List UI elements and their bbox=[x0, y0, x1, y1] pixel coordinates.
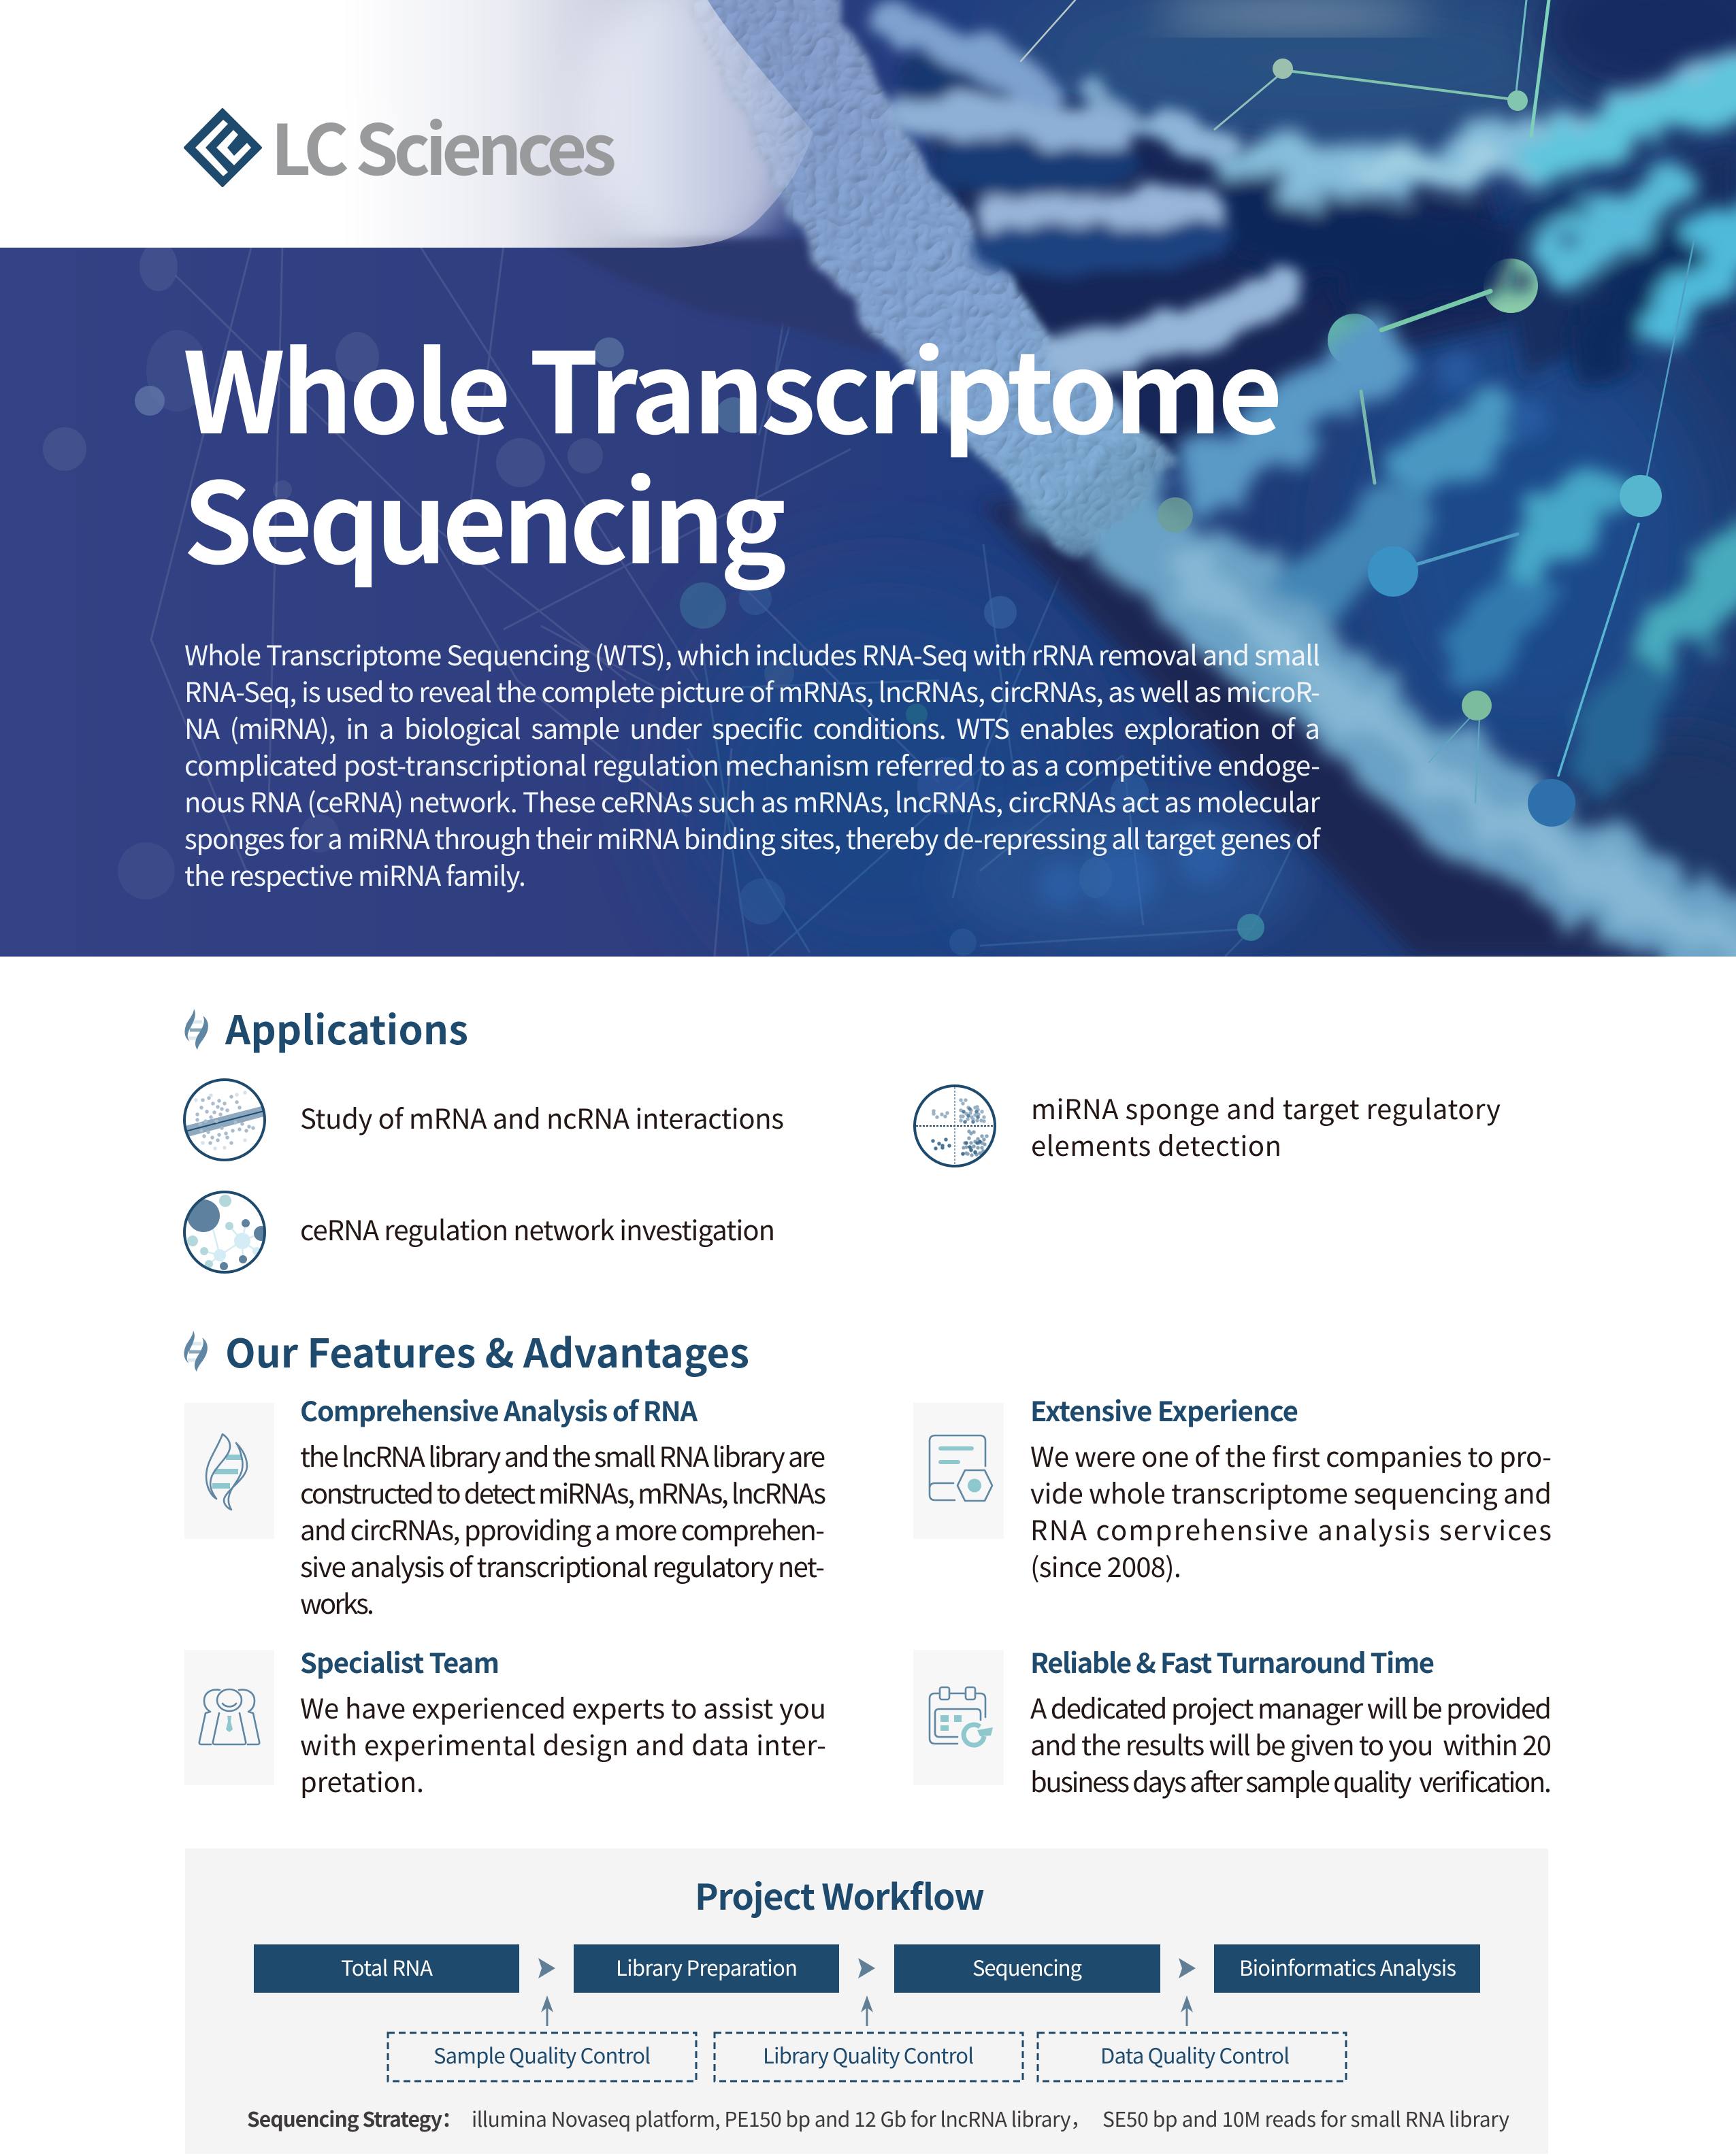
step: Total RNA: Total RNA bbox=[341, 1951, 433, 1982]
step: Bioinformatics Analysis bbox=[1214, 1944, 1480, 1993]
icon: scatter plot circle bbox=[182, 1080, 267, 1160]
quality control: data: Data Quality Control bbox=[1100, 2039, 1290, 2070]
sequencing strategy note: Sequencing Strategy： bbox=[247, 2103, 462, 2133]
logo panel: white rounded fade bbox=[0, 0, 813, 248]
heading: Applications: Applications bbox=[225, 999, 468, 1056]
feature: Comprehensive Analysis of RNA: the lncRNA library and the small RNA library are bbox=[300, 1436, 825, 1475]
intro paragraph: Whole Transcriptome Sequencing (WTS), which includes RNA-Seq with rRNA removal and small bbox=[184, 634, 1320, 674]
far DNA rungs and lower strand, defocused bbox=[1062, 75, 1736, 973]
quality control: library bbox=[715, 2033, 1023, 2081]
feature: Comprehensive Analysis of RNA: and circRNAs, pproviding a more comprehen- bbox=[300, 1509, 825, 1548]
DNA backbone strand bbox=[749, 0, 1130, 510]
feature: Comprehensive Analysis of RNA: Comprehensive Analysis of RNA bbox=[300, 1390, 698, 1429]
network nodes behind the DNA bbox=[1328, 259, 1538, 367]
application: miRNA sponge detection: miRNA sponge and target regulatory bbox=[1031, 1088, 1501, 1127]
sequencing strategy note: SE50 bp and 10M reads for small RNA library bbox=[1102, 2103, 1509, 2133]
feature: Specialist Team: Specialist Team bbox=[300, 1642, 499, 1681]
feature: Extensive Experience bbox=[913, 1390, 1552, 1585]
icon: team tile bbox=[184, 1650, 274, 1785]
intro paragraph: sponges for a miRNA through their miRNA binding sites, thereby de-repressing all target genes of bbox=[184, 818, 1322, 857]
feature: Extensive Experience: RNA comprehensive analysis services bbox=[1030, 1509, 1552, 1548]
title: Whole Transcriptome bbox=[183, 305, 1283, 466]
intro paragraph: the respective miRNA family. bbox=[184, 855, 526, 894]
application: ceRNA regulation network bbox=[184, 1192, 775, 1272]
feature: Reliable & Fast Turnaround Time bbox=[913, 1642, 1552, 1800]
feature: Extensive Experience: Extensive Experience bbox=[1030, 1390, 1298, 1429]
icon: small DNA helix bbox=[184, 1009, 208, 1050]
arrow: step chevrons bbox=[538, 1958, 1196, 1978]
panel: project workflow bbox=[185, 1848, 1548, 2154]
logo mark diamond bbox=[185, 110, 261, 186]
application: ceRNA regulation network: ceRNA regulation network investigation bbox=[300, 1209, 775, 1248]
quality control: data bbox=[1038, 2033, 1346, 2081]
sequencing strategy note: illumina Novaseq platform, PE150 bp and 12 Gb for lncRNA library， bbox=[472, 2103, 1091, 2133]
sequencing strategy note bbox=[247, 2103, 1509, 2133]
intro paragraph: NA (miRNA), in a biological sample under specific conditions. WTS enables exploration of a bbox=[184, 708, 1320, 747]
icon: small DNA helix bbox=[184, 1331, 208, 1372]
quality control: library: Library Quality Control bbox=[763, 2039, 974, 2070]
feature: Extensive Experience: (since 2008). bbox=[1030, 1546, 1181, 1585]
workflow heading: Project Workflow bbox=[695, 1869, 985, 1920]
feature: Specialist Team bbox=[184, 1642, 826, 1800]
step: Sequencing bbox=[894, 1944, 1160, 1993]
background glow tones bbox=[578, 0, 1736, 986]
application: mRNA and ncRNA interactions: Study of mRNA and ncRNA interactions bbox=[300, 1097, 784, 1137]
quality control: sample: Sample Quality Control bbox=[433, 2039, 651, 2070]
feature: Extensive Experience: vide whole transcriptome sequencing and bbox=[1030, 1472, 1552, 1512]
logo: LC Sciences bbox=[185, 95, 617, 195]
feature: Comprehensive Analysis of RNA bbox=[184, 1390, 826, 1622]
glowing network nodes bbox=[1021, 0, 1694, 827]
step: Sequencing: Sequencing bbox=[972, 1951, 1083, 1982]
feature: Specialist Team: with experimental design and data inter- bbox=[300, 1724, 826, 1763]
intro paragraph: complicated post-transcriptional regulation mechanism referred to as a competitive endoge- bbox=[184, 744, 1320, 784]
arrow: quality control up arrows bbox=[541, 1995, 1193, 2026]
step: Bioinformatics Analysis: Bioinformatics Analysis bbox=[1239, 1951, 1456, 1982]
hero banner with DNA artwork bbox=[0, 0, 1736, 986]
application: miRNA sponge detection bbox=[915, 1086, 1501, 1166]
step: Total RNA bbox=[254, 1944, 519, 1993]
feature: Reliable & Fast Turnaround Time: and the results will be given to you within 20 bbox=[1030, 1724, 1552, 1763]
title: Sequencing bbox=[183, 435, 787, 596]
feature: Comprehensive Analysis of RNA: constructed to detect miRNAs, mRNAs, lncRNAs bbox=[300, 1472, 826, 1512]
icon: calendar tile bbox=[913, 1650, 1004, 1785]
logo wordmark: LC Sciences bbox=[271, 95, 617, 195]
feature: Specialist Team: pretation. bbox=[300, 1761, 424, 1800]
feature: Comprehensive Analysis of RNA: works. bbox=[300, 1582, 374, 1622]
intro paragraph: RNA-Seq, is used to reveal the complete picture of mRNAs, lncRNAs, circRNAs, as well as microR- bbox=[184, 671, 1320, 710]
feature: Comprehensive Analysis of RNA: sive analysis of transcriptional regulatory net- bbox=[300, 1546, 825, 1585]
icon: quadrant scatter circle bbox=[915, 1086, 995, 1166]
feature: Reliable & Fast Turnaround Time: business days after sample quality verification. bbox=[1030, 1761, 1552, 1800]
title bbox=[183, 305, 1283, 596]
feature: Extensive Experience: We were one of the first companies to pro- bbox=[1030, 1436, 1552, 1475]
step: Library Preparation: Library Preparation bbox=[616, 1951, 798, 1982]
heading: Our Features & Advantages: Our Features & Advantages bbox=[225, 1322, 749, 1379]
intro paragraph bbox=[184, 634, 1322, 894]
step: Library Preparation bbox=[574, 1944, 839, 1993]
application: miRNA sponge detection: elements detection bbox=[1031, 1125, 1281, 1164]
icon: document tile bbox=[913, 1403, 1004, 1539]
application: mRNA and ncRNA interactions bbox=[182, 1080, 784, 1160]
quality control: sample bbox=[388, 2033, 696, 2081]
icon: DNA tile bbox=[184, 1403, 274, 1539]
dark rear strand and shadow masses bbox=[544, 61, 1736, 957]
feature: Specialist Team: We have experienced experts to assist you bbox=[300, 1687, 826, 1727]
intro paragraph: nous RNA (ceRNA) network. These ceRNAs such as mRNAs, lncRNAs, circRNAs act as molecular bbox=[184, 781, 1320, 820]
icon: network circle bbox=[184, 1192, 269, 1272]
feature: Reliable & Fast Turnaround Time: Reliable & Fast Turnaround Time bbox=[1030, 1642, 1435, 1681]
feature: Reliable & Fast Turnaround Time: A dedicated project manager will be provided bbox=[1030, 1687, 1552, 1727]
faint network lines and bokeh circles bbox=[43, 248, 1550, 957]
near DNA rungs bbox=[885, 20, 1279, 357]
